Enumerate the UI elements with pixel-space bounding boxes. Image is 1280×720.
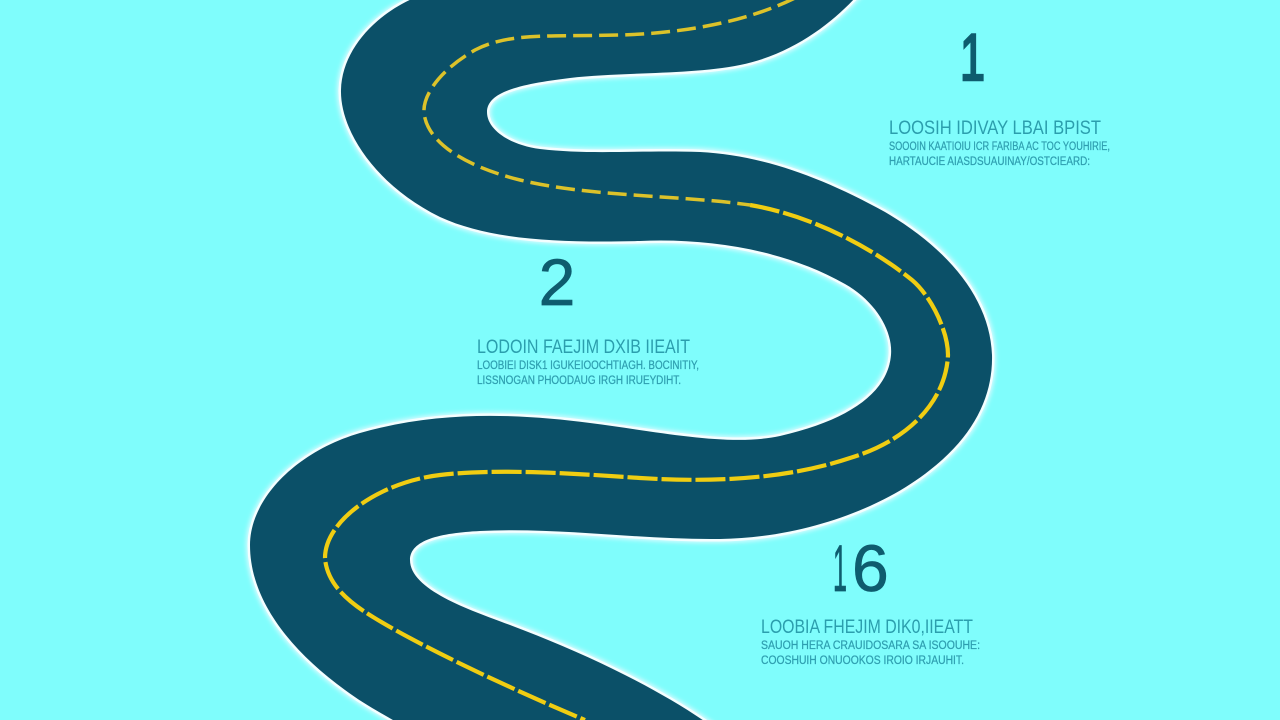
step 1 heading: LOOSIH IDIVAY LBAI BPIST bbox=[889, 118, 1101, 139]
road surface bbox=[250, 0, 992, 720]
yellow dashed centre line: lower section bbox=[325, 205, 948, 720]
step 2 description: LISSNOGAN PHOODAUG IRGH IRUEYDIHT. bbox=[477, 375, 681, 387]
step 2 description: LOOBIEI DISK1 IGUKEIOOCHTIAGH. BOCINITIY, bbox=[477, 360, 699, 372]
step 3 description bbox=[761, 640, 980, 667]
step 1 bbox=[889, 20, 1110, 168]
step 1 description: SOOOIN KAATIOIU ICR FARIBA AC TOC YOUHIRIE, bbox=[889, 141, 1110, 153]
step 3 number: 1 bbox=[833, 531, 847, 605]
step 2 heading: LODOIN FAEJIM DXIB IIEAIT bbox=[477, 337, 690, 358]
step 3 number bbox=[833, 531, 889, 605]
step 3 description: COOSHUIH ONUOOKOS IROIO IRJAUHIT. bbox=[761, 655, 964, 667]
step 2 bbox=[477, 245, 699, 387]
step 3 description: SAUOH HERA CRAUIDOSARA SA ISOOUHE: bbox=[761, 640, 980, 652]
step 3 bbox=[761, 531, 980, 667]
road white edge line bbox=[250, 0, 992, 720]
step 2 description bbox=[477, 360, 699, 387]
winding road bbox=[250, 0, 992, 720]
road edge glow bbox=[250, 0, 992, 720]
yellow dashed centre line: upper section bbox=[424, 0, 795, 205]
step 1 description: HARTAUCIE AIASDSUAUINAY/OSTCIEARD: bbox=[889, 156, 1090, 168]
step 3 number: 6 bbox=[852, 531, 889, 605]
step 1 description bbox=[889, 141, 1110, 168]
step 3 heading: LOOBIA FHEJIM DIK0,IIEATT bbox=[761, 617, 973, 638]
step 1 number: 1 bbox=[960, 20, 985, 94]
step 2 number: 2 bbox=[539, 245, 575, 319]
